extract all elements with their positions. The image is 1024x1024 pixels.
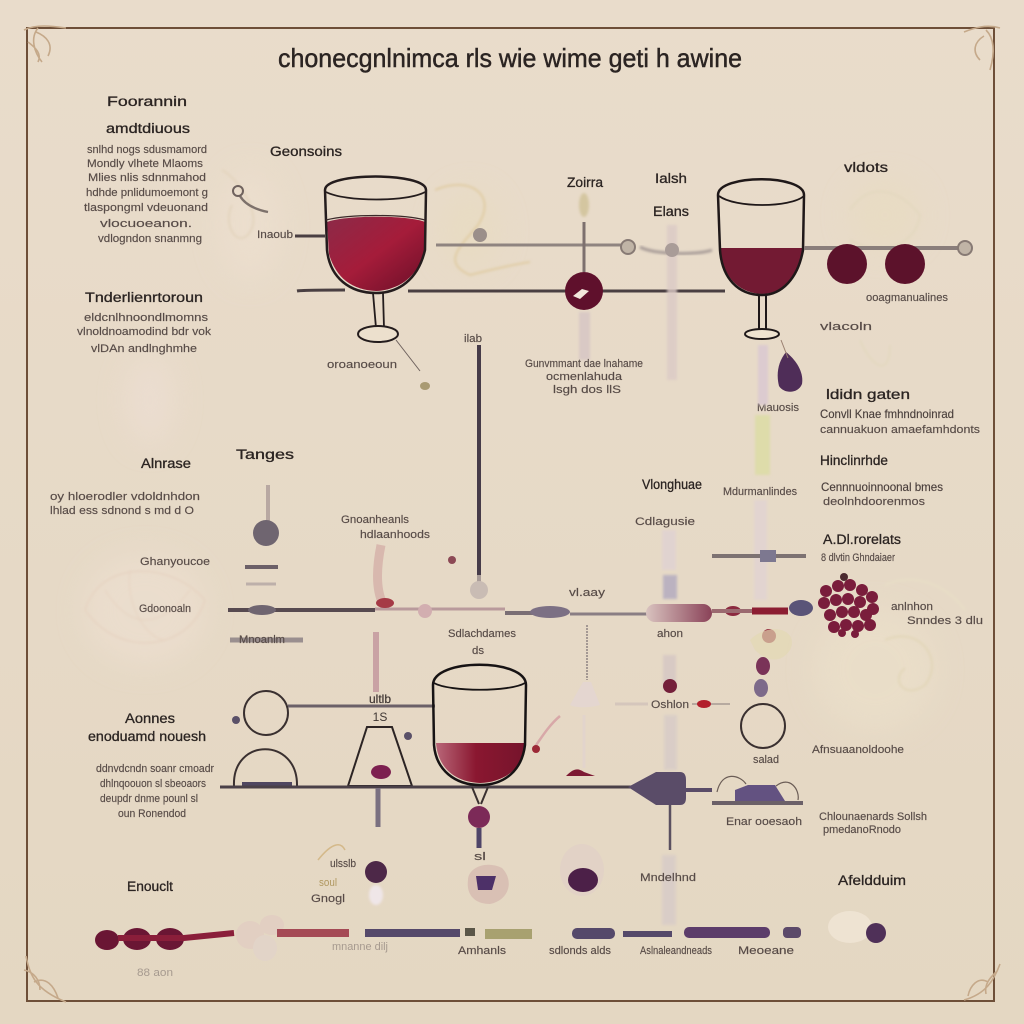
text block: lower left: oun Ronendod	[118, 808, 186, 820]
label: centre left	[341, 514, 431, 541]
labels: mid row right: Cdlagusie	[635, 516, 695, 528]
text block: centre: ocmenlahuda	[546, 371, 623, 383]
text block: left middle: vlnoldnoamodind bdr vok	[77, 326, 212, 338]
label: under rail centre: ds	[472, 645, 485, 657]
text block: lower left: deupdr dnme pounl sl	[100, 793, 198, 805]
labels right lower: pmedanoRnodo	[823, 824, 901, 836]
labels: mid row right: Mdurmanlindes	[723, 486, 797, 498]
text block: left middle: vlDAn andlnghmhe	[91, 343, 197, 355]
text block: left middle: Tnderlienrtoroun	[85, 290, 203, 305]
vine swirl decorations	[85, 170, 965, 690]
wine glass 1	[325, 176, 426, 371]
labels under bottom rail: 88 aon	[137, 967, 173, 979]
circle icon right	[741, 704, 785, 766]
text block: centre	[525, 358, 643, 396]
text block: lower left	[88, 711, 214, 820]
text block: centre: Gunvmmant dae lnahame	[525, 358, 643, 370]
text block: top left: snlhd nogs sdusmamord	[87, 144, 207, 156]
bottom rail	[95, 911, 886, 961]
labels right top: vlacoln	[820, 321, 872, 333]
labels under bottom rail: Meoeane	[738, 945, 794, 957]
text block: left centre	[50, 491, 200, 517]
flask icon: centre left	[376, 545, 456, 608]
label and bar: right of flask: Oshlon	[651, 699, 689, 711]
labels: Zoina, Ialsn, Elans	[567, 171, 689, 219]
circle and dome icon left	[232, 691, 435, 787]
top horizontal rail	[297, 290, 725, 291]
labels under bottom rail	[137, 941, 794, 979]
label: centre left: hdlaanhoods	[360, 529, 431, 541]
vertical bar centre right	[640, 225, 712, 380]
text block: right: 8 dlvtin Ghndaiaer	[821, 552, 895, 564]
labels right lower: Chlounaenards Sollsh	[819, 811, 927, 823]
text block: right: Cennnuoinnoonal bmes	[821, 480, 943, 494]
labels right lower: Afnsuaanoldoohe	[812, 744, 904, 756]
circle icon right: salad	[753, 754, 779, 766]
small beaker icons, bottom row: ulsslb	[330, 858, 356, 870]
label: mid: ahon	[657, 628, 683, 640]
labels: by grapes	[891, 601, 983, 627]
text block: top left: Mondly vlhete Mlaoms	[87, 158, 204, 170]
label: grape: Mauosis	[757, 402, 800, 414]
short bar under rail	[230, 634, 303, 646]
pale column under glass 2	[754, 345, 770, 600]
grape cluster	[818, 573, 879, 638]
text block: lower left: Aonnes	[125, 711, 175, 726]
connector with pin, left of glass 1	[233, 186, 325, 236]
main middle rail	[228, 600, 813, 622]
text block: lower left: ddnvdcndn soanr cmoadr	[96, 763, 214, 775]
labels: mid row right: Vlonghuae	[642, 477, 702, 492]
small beaker icons, bottom row: sl	[474, 851, 486, 863]
label: Alnrase and Tanges: Tanges	[236, 447, 294, 462]
label: vlaay: vl.aay	[569, 587, 606, 599]
labels right lower: Enar ooesaoh	[726, 816, 802, 828]
label: left of glass 1: Inaoub	[257, 229, 293, 241]
central vertical line	[470, 345, 488, 599]
labels under bottom rail: Aslnaleandneads	[640, 945, 712, 957]
vertical line under rail	[376, 788, 380, 827]
text block: right: Hinclinrhde	[820, 453, 888, 468]
text block: top left: tlaspongml vdeuonand	[84, 202, 208, 214]
label: under rail centre	[448, 628, 517, 657]
text block: right: ldidn gaten	[826, 387, 910, 402]
text block: centre: lsgh dos llS	[553, 384, 621, 396]
label: above central line: ilab	[464, 333, 482, 345]
text block: right: A.Dl.rorelats	[823, 532, 901, 547]
short bar with knob, right	[712, 550, 806, 562]
left vertical stand with dark bulb	[245, 485, 279, 615]
labels under bottom rail: sdlonds alds	[549, 945, 612, 957]
flask small with hanging line	[532, 625, 600, 776]
text block: top left: Foorannin	[107, 94, 187, 109]
labels: Zoina, Ialsn, Elans: Elans	[653, 204, 689, 219]
short bar under rail: Mnoanlm	[239, 634, 285, 646]
wine glass 2	[718, 179, 804, 339]
text block: top left: hdhde pnlidumoemont g	[86, 187, 208, 199]
text block: top left: amdtdiuous	[106, 121, 190, 136]
flask icon: trapezoid: 1S	[373, 710, 387, 724]
junction block and right rail	[628, 772, 803, 850]
small beaker icons, bottom row: Gnogl	[311, 893, 345, 905]
label: Alnrase and Tanges	[141, 447, 294, 471]
label: centre left: Gnoanheanls	[341, 514, 410, 526]
drops column right	[663, 629, 792, 697]
label: under rail centre: Sdlachdames	[448, 628, 517, 640]
text block: left centre: oy hloerodler vdoldnhdon	[50, 491, 200, 503]
labels under bottom rail: Amhanls	[458, 945, 507, 957]
labels under bottom rail: mnanne dilj	[332, 941, 388, 953]
lower horizontal rail	[220, 786, 640, 788]
text block: right: cannuakuon amaefamhdonts	[820, 424, 981, 436]
label: bottom right: Afeldduim	[838, 873, 906, 888]
labels right top: ooagmanualines	[866, 292, 949, 304]
labels: left rail: Gdoonoaln	[139, 603, 191, 615]
vertical fading columns, centre right	[662, 530, 677, 925]
flask icon: trapezoid	[348, 632, 412, 786]
labels: by grapes: Snndes 3 dlu	[907, 615, 983, 627]
label: bottom left: Enouclt	[127, 879, 173, 894]
mark: small leaf under glass 1	[420, 382, 430, 390]
small beaker icons, bottom row: Mndelhnd	[640, 872, 696, 884]
text block: lower left: enoduamd nouesh	[88, 729, 206, 744]
label: under glass 1: oroanoeoun	[327, 359, 397, 371]
labels: mid row right	[635, 477, 797, 528]
text block: top left: Mlies nlis sdnnmahod	[88, 172, 206, 184]
labels: Zoina, Ialsn, Elans: Ialsh	[655, 171, 687, 186]
flask icon: trapezoid: ultlb	[369, 692, 391, 706]
text block: lower left: dhlnqoouon sl sbeoaors	[100, 778, 206, 790]
wine glass 3	[433, 665, 526, 848]
labels: by grapes: anlnhon	[891, 601, 933, 613]
label: vldots: vldots	[844, 160, 888, 175]
text block: left centre: lhlad ess sdnond s md d O	[50, 505, 194, 517]
rail with node, top centre	[436, 193, 635, 360]
label: Alnrase and Tanges: Alnrase	[141, 456, 191, 471]
label and bar: right of flask	[615, 699, 730, 711]
labels right lower	[726, 744, 927, 836]
text block: right: deolnhdoorenmos	[823, 496, 926, 508]
text block: right	[820, 387, 981, 564]
labels: Zoina, Ialsn, Elans: Zoirra	[567, 175, 603, 190]
label: Geonsoins: Geonsoins	[270, 144, 342, 159]
labels: left rail: Ghanyoucoe	[140, 556, 210, 568]
small beaker icons, bottom row	[311, 844, 696, 905]
text block: left middle	[77, 290, 212, 355]
text block: left middle: eldcnlhnoondlmomns	[84, 312, 209, 324]
text block: top left: vdlogndon snanmng	[98, 233, 202, 245]
faint decorative washes	[85, 170, 935, 730]
small beaker icons, bottom row: soul	[319, 877, 337, 889]
text block: top left	[84, 94, 208, 245]
labels right top	[820, 292, 949, 333]
icon: small grape	[778, 340, 802, 392]
title: chonecgnlnimca rls wie wime geti h awine	[278, 43, 742, 73]
labels: left rail	[139, 556, 210, 615]
rail with two dark dots	[804, 241, 972, 284]
text block: top left: vlocuoeanon.	[100, 218, 192, 230]
text block: right: Convll Knae fmhndnoinrad	[820, 407, 954, 421]
